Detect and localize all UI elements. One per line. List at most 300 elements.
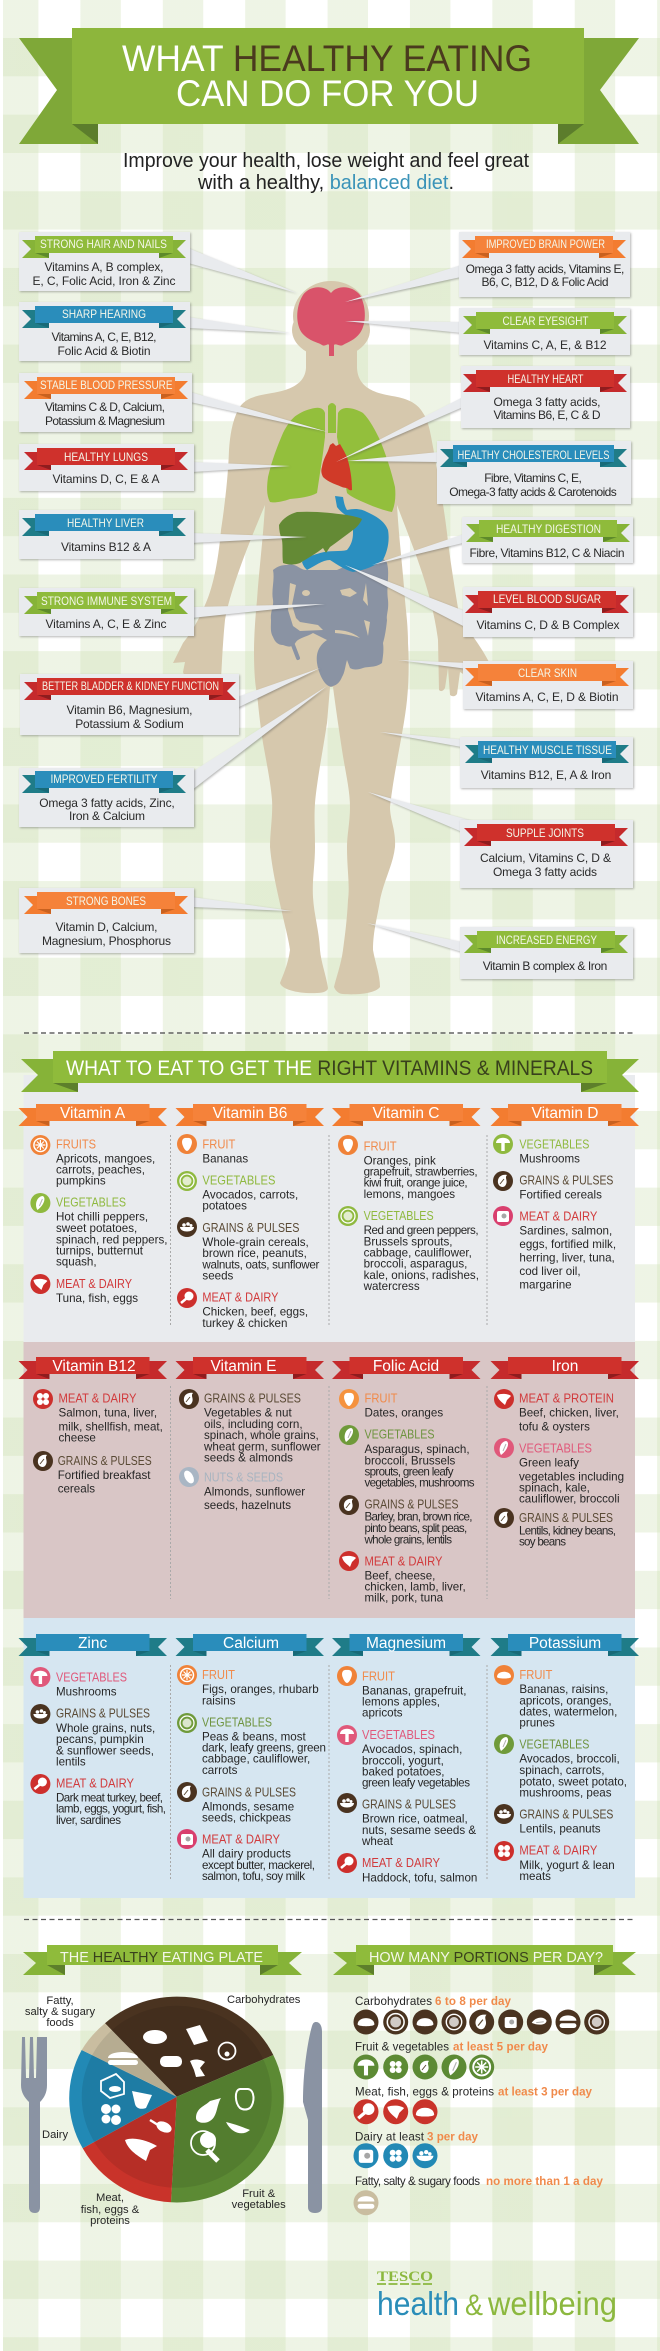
icon: vegetables (494, 1438, 514, 1458)
callout: healthy lungs (19, 444, 290, 491)
column: Zinc: lamb, eggs, yogurt, fish, (56, 1803, 166, 1816)
column: Vitamin E: oils, including corn, (204, 1418, 303, 1431)
column: Vitamin D: Vitamin D (532, 1105, 598, 1122)
column: Zinc: VEGETABLES (56, 1670, 127, 1684)
column: Vitamin E: Almonds, sunflower (204, 1486, 305, 1499)
column: Calcium: Calcium (223, 1635, 279, 1652)
column: Vitamin A: pumpkins (56, 1175, 106, 1188)
card (460, 820, 633, 888)
column: Potassium: Lentils, peanuts (519, 1823, 601, 1836)
callout: increased energy: Vitamin B complex & Iron (483, 959, 607, 973)
ribbon heading (22, 236, 186, 258)
callout: improved fertility: Omega 3 fatty acids, Zinc, (39, 796, 175, 810)
column: Potassium: MEAT & DAIRY (519, 1844, 598, 1858)
column: Vitamin A: squash, (56, 1256, 97, 1269)
callout: increased energy (367, 923, 633, 979)
icon: meat (337, 1853, 357, 1873)
card (463, 661, 633, 709)
card (19, 510, 194, 559)
callout: improved fertility: IMPROVED FERTILITY (50, 772, 158, 786)
column: Folic Acid: whole grains, lentils (364, 1533, 452, 1546)
column: Vitamin B6: turkey & chicken (202, 1317, 287, 1330)
column: Potassium: VEGETABLES (519, 1737, 589, 1751)
plate pie chart: proteins (90, 2215, 130, 2227)
icon: vegetables (494, 1734, 514, 1754)
body silhouette (173, 281, 489, 994)
column: Vitamin B12: milk, shellfish, meat, (58, 1420, 163, 1433)
column: Magnesium: Magnesium (366, 1635, 446, 1652)
column: Vitamin A: VEGETABLES (56, 1196, 126, 1210)
icons row (354, 2054, 494, 2080)
callout: clear eyesight: Vitamins C, A, E, & B12 (484, 338, 607, 352)
pointer to shin (192, 897, 292, 911)
column: Magnesium: FRUIT (362, 1669, 395, 1683)
logo: Tesco health and wellbeing: wellbeing (487, 2285, 617, 2322)
card (463, 587, 633, 637)
icon: grains (339, 1495, 359, 1515)
column: Vitamin B12: Vitamin B12 (52, 1358, 136, 1375)
column: Calcium: MEAT & DAIRY (202, 1832, 281, 1846)
column: Vitamin B6: walnuts, oats, sunflower (201, 1258, 320, 1271)
column: Folic Acid: milk, pork, tuna (364, 1592, 444, 1605)
ribbon heading (464, 824, 628, 846)
card (19, 444, 194, 491)
icon: fruit (338, 1135, 358, 1155)
column: Vitamin B6 (176, 1104, 324, 1330)
column: Vitamin E: NUTS & SEEDS (204, 1471, 283, 1485)
intro text: with a healthy, balanced diet. (197, 172, 454, 194)
logo: Tesco health and wellbeing: & (465, 2289, 483, 2322)
card (19, 302, 190, 361)
column: Magnesium: Brown rice, oatmeal, (362, 1813, 468, 1826)
column: Zinc: Zinc (78, 1635, 107, 1652)
icon: fruit (177, 1134, 197, 1154)
heart (321, 443, 352, 490)
column: Zinc: Dark meat turkey, beef, (56, 1792, 163, 1805)
callout: supple joints (368, 792, 633, 888)
callout: healthy heart: HEALTHY HEART (508, 372, 584, 386)
icon: grains (177, 1782, 197, 1802)
plate pie chart (25, 1994, 301, 2227)
icon: meat (30, 1274, 50, 1294)
plate label: fatty: Fatty, (46, 1995, 74, 2007)
column: Potassium: spinach, carrots, (519, 1764, 604, 1777)
ribbon heading (465, 664, 629, 686)
callout: stable blood pressure: STABLE BLOOD PRESSURE (40, 378, 173, 392)
icons row (354, 2010, 609, 2034)
column: Folic Acid: GRAINS & PULSES (364, 1498, 458, 1512)
column: Calcium: VEGETABLES (202, 1715, 272, 1729)
callout: healthy lungs: Vitamins D, C, E & A (52, 472, 160, 486)
column: Iron: GRAINS & PULSES (519, 1511, 613, 1525)
ribbon heading (24, 592, 188, 614)
callout: level blood sugar: Vitamins C, D & B Complex (476, 618, 620, 632)
card (437, 441, 631, 504)
ribbon heading (24, 892, 188, 914)
column: Potassium: dates, watermelon, (519, 1705, 617, 1718)
column: Vitamin A: Apricots, mangoes, (56, 1152, 155, 1165)
pointer to gut (372, 533, 467, 565)
column: Vitamin A: FRUITS (56, 1137, 96, 1151)
plate pie chart: vegetables (232, 2199, 286, 2211)
panel: orange vitamins (24, 1075, 635, 1342)
column: Calcium: All dairy products (202, 1848, 291, 1861)
callout: clear skin: CLEAR SKIN (518, 666, 577, 680)
callout: level blood sugar: LEVEL BLOOD SUGAR (493, 592, 601, 606)
callout: healthy muscle tissue: HEALTHY MUSCLE TISSUE (483, 743, 612, 757)
callout: improved brain power: B6, C, B12, D & Folic Acid (482, 275, 608, 289)
column: Magnesium: Avocados, spinach, (362, 1743, 462, 1756)
column: Magnesium: nuts, sesame seeds & (362, 1824, 476, 1837)
pointer to ear (188, 317, 290, 333)
icon: grains (494, 1804, 514, 1824)
icon: vegetables (177, 1713, 197, 1733)
column: Vitamin D: cod liver oil, (519, 1265, 581, 1278)
icon: meat (177, 1288, 197, 1308)
icon: grains (494, 1508, 514, 1528)
card (460, 927, 633, 979)
column: Calcium: carrots (202, 1764, 238, 1777)
intestine gaps (288, 583, 370, 638)
column: Potassium (490, 1634, 639, 1883)
ribbon heading (24, 678, 236, 700)
icon: vegetables (338, 1206, 358, 1226)
intestines (271, 558, 388, 687)
card (19, 588, 194, 636)
column: Vitamin B6: Whole-grain cereals, (202, 1236, 309, 1249)
column: Folic Acid: Beef, cheese, (364, 1569, 435, 1582)
column: Calcium: Peas & beans, most (202, 1730, 307, 1743)
callout: healthy digestion (372, 517, 633, 565)
callout: supple joints: Calcium, Vitamins C, D & (480, 851, 611, 865)
column: Vitamin A: Tuna, fish, eggs (56, 1292, 138, 1305)
column: Vitamin B12: cheese (58, 1431, 96, 1444)
column: Zinc: liver, sardines (56, 1814, 121, 1827)
ribbon heading (24, 448, 188, 470)
banner: how many portions per day (333, 1945, 636, 1975)
column: Vitamin A: sweet potatoes, (56, 1222, 137, 1235)
column: Calcium: raisins (202, 1694, 236, 1707)
column: Vitamin B6: Vitamin B6 (213, 1105, 287, 1122)
column: Iron: spinach, kale, (519, 1481, 590, 1494)
column: Calcium (176, 1634, 326, 1883)
icons row (354, 2143, 438, 2168)
card (19, 232, 190, 291)
icon: meat (33, 1389, 53, 1409)
column: Vitamin C: kale, onions, radishes, (364, 1269, 479, 1282)
pointer to eye (345, 321, 462, 333)
column: Calcium: Almonds, sesame (202, 1800, 294, 1813)
column: Calcium: cabbage, cauliflower, (202, 1753, 310, 1766)
logo: Tesco health and wellbeing: TESCO (377, 2269, 433, 2285)
column: Vitamin B6: brown rice, peanuts, (202, 1247, 307, 1260)
column: Vitamin B6: Chicken, beef, eggs, (202, 1306, 308, 1319)
column: Iron: soy beans (519, 1535, 566, 1548)
column: Folic Acid: VEGETABLES (364, 1428, 434, 1442)
callout: strong bones (19, 888, 292, 953)
callout: healthy lungs: HEALTHY LUNGS (64, 450, 148, 464)
icon: fork (21, 2037, 47, 2213)
column: Zinc: MEAT & DAIRY (56, 1777, 135, 1791)
icons row (354, 2099, 438, 2124)
column: Folic Acid: pinto beans, split peas, (364, 1522, 467, 1535)
callout: strong hair and nails: Vitamins A, B complex, (44, 260, 164, 274)
column: Vitamin B12 (18, 1357, 167, 1496)
callout: strong hair and nails: STRONG HAIR AND NAILS (40, 237, 167, 251)
callout: strong bones: Magnesium, Phosphorus (42, 934, 171, 948)
column: Vitamin E: Vitamin E (210, 1358, 277, 1375)
card (461, 366, 630, 428)
portions: carbohydrates: Carbohydrates (355, 1995, 432, 2008)
plate label: meat: Meat, (96, 2192, 124, 2204)
icon: meat (494, 1389, 514, 1409)
column: Vitamin C: lemons, mangoes (364, 1188, 455, 1201)
icon: grains (30, 1704, 50, 1724)
segment: carbohydrates (105, 1997, 273, 2097)
icon: vegetables (177, 1171, 197, 1191)
column: Vitamin A: turnips, butternut (56, 1244, 144, 1257)
icon: grains (337, 1793, 357, 1813)
column: Magnesium: broccoli, yogurt, (362, 1754, 444, 1767)
callout: healthy cholesterol levels: Omega-3 fatty acids & Carotenoids (449, 485, 617, 499)
column: Vitamin C (332, 1104, 480, 1293)
callout: strong immune system (19, 588, 325, 636)
logo: Tesco health and wellbeing: health (377, 2285, 459, 2322)
callout: supple joints: Omega 3 fatty acids (493, 865, 597, 879)
icon: vegetables (30, 1193, 50, 1213)
callout: improved brain power: Omega 3 fatty acids, Vitamins E, (466, 262, 624, 276)
pointer to pelvis (192, 686, 327, 790)
column: Zinc: Whole grains, nuts, (56, 1722, 155, 1735)
column: Potassium: Potassium (529, 1635, 601, 1652)
column: Iron: vegetables including (519, 1470, 624, 1483)
icon: meat (494, 1841, 514, 1861)
portions: dairy (354, 2131, 479, 2168)
column: Magnesium: apricots (362, 1707, 403, 1720)
callout: healthy liver (19, 510, 307, 559)
title text: WHAT HEALTHY EATING (122, 38, 532, 79)
icon: fruit (494, 1665, 514, 1685)
callout: healthy liver: HEALTHY LIVER (67, 516, 144, 530)
callout: clear skin: Vitamins A, C, E, D & Biotin (476, 690, 618, 704)
column: Vitamin B12: Salmon, tuna, liver, (58, 1407, 157, 1420)
column: Folic Acid: Dates, oranges (364, 1407, 443, 1420)
callout: healthy digestion: HEALTHY DIGESTION (496, 522, 601, 536)
callout: improved brain power (345, 232, 630, 302)
column: Zinc: Mushrooms (56, 1685, 117, 1698)
panel: blue vitamins (24, 1618, 635, 1898)
column: Potassium: meats (519, 1870, 551, 1883)
callout: healthy heart: Omega 3 fatty acids, (494, 395, 600, 409)
column: Folic Acid (332, 1357, 480, 1605)
pointer to lung (192, 462, 290, 472)
liver (279, 512, 362, 564)
column: Magnesium (332, 1634, 480, 1884)
column: Vitamin B12: cereals (58, 1483, 95, 1496)
column: Vitamin B6: Bananas (202, 1152, 248, 1165)
callout: healthy liver: Vitamins B12 & A (61, 540, 151, 554)
segment: meat (83, 2097, 177, 2202)
icon: vegetables (339, 1425, 359, 1445)
icon: grains (179, 1389, 199, 1409)
callout: strong immune system: Vitamins A, C, E & Zinc (46, 617, 166, 631)
portions: carbohydrates: 6 to 8 per day (435, 1995, 512, 2008)
column: Vitamin C: kiwi fruit, orange juice, (364, 1177, 468, 1190)
callout: supple joints: SUPPLE JOINTS (506, 826, 584, 840)
callout: improved fertility: Iron & Calcium (69, 809, 145, 823)
human body figure (173, 281, 489, 994)
column: Folic Acid: broccoli, Brussels (364, 1454, 456, 1467)
column: Vitamin E: spinach, whole grains, (204, 1429, 319, 1442)
portions: fatty salty and sugary foods (354, 2175, 604, 2215)
column: Magnesium: baked potatoes, (362, 1765, 445, 1778)
logo: Tesco health and wellbeing (377, 2269, 617, 2322)
callout: healthy digestion: Fibre, Vitamins B12, C & Niacin (470, 546, 624, 560)
column: Vitamin D: Mushrooms (519, 1152, 580, 1165)
icon: fruit (337, 1666, 357, 1686)
intro text (123, 150, 529, 194)
column: Vitamin D (490, 1104, 639, 1292)
callout: better bladder and kidney function: BETTER BLADDER & KIDNEY FUNCTION (42, 679, 219, 693)
column: Calcium: dark, leafy greens, green (202, 1742, 326, 1755)
portions: fatty salty and sugary foods: no more than 1 a day (486, 2175, 604, 2188)
column: Magnesium: MEAT & DAIRY (362, 1856, 441, 1870)
callout: healthy heart: Vitamins B6, E, C & D (494, 408, 601, 422)
column: Vitamin D: Fortified cereals (519, 1188, 602, 1201)
ribbon heading (463, 370, 627, 392)
column: Vitamin B6: GRAINS & PULSES (202, 1221, 299, 1235)
column: Zinc: & sunflower seeds, (56, 1744, 154, 1757)
callout: stable blood pressure: Potassium & Magnesium (45, 414, 165, 428)
callout: increased energy: INCREASED ENERGY (496, 933, 597, 947)
ribbon heading (24, 377, 188, 399)
pointer to stomach (345, 565, 467, 628)
icon: meat (493, 1206, 513, 1226)
column: Vitamin C: Vitamin C (373, 1105, 439, 1122)
callout: healthy cholesterol levels: Fibre, Vitamins C, E, (484, 471, 582, 485)
column: Vitamin C: broccoli, asparagus, (364, 1258, 467, 1271)
column: Magnesium: green leafy vegetables (362, 1777, 470, 1790)
column: Folic Acid: Folic Acid (373, 1358, 439, 1375)
banner: the healthy eating plate: THE HEALTHY EATING PLATE (60, 1949, 263, 1966)
ribbon heading (462, 236, 626, 258)
plate label: fruit and vegetables: Fruit & (242, 2188, 276, 2200)
portions: carbohydrates (354, 1995, 609, 2034)
callout: strong bones: STRONG BONES (66, 894, 146, 908)
column: Vitamin A: Hot chilli peppers, (56, 1211, 148, 1224)
column: Magnesium: GRAINS & PULSES (362, 1797, 456, 1811)
column: Iron: Lentils, kidney beans, (519, 1524, 616, 1537)
title banner (19, 28, 639, 144)
column: Vitamin E: seeds & almonds (204, 1452, 293, 1465)
column: Vitamin C: Oranges, pink (364, 1154, 436, 1167)
ribbon heading (22, 771, 186, 793)
callout: sharp hearing: Vitamins A, C, E, B12, (52, 330, 156, 344)
callout: clear eyesight (345, 308, 630, 355)
icon: nuts (179, 1467, 199, 1487)
column: Iron: Beef, chicken, liver, (519, 1407, 619, 1420)
column: Magnesium: lemons apples, (362, 1695, 440, 1708)
column: Vitamin D: margarine (519, 1279, 572, 1292)
column: Potassium: Bananas, raisins, (519, 1683, 608, 1696)
column: Vitamin A: spinach, red peppers, (56, 1233, 168, 1246)
lungs (267, 403, 395, 512)
pointer to head (188, 248, 297, 293)
column: Vitamin B12: Fortified breakfast (58, 1469, 151, 1482)
intro text: Improve your health, lose weight and feel great (123, 150, 529, 172)
callout: sharp hearing (19, 302, 290, 361)
icon: meat (30, 1774, 50, 1794)
column: Vitamin B6: Avocados, carrots, (202, 1188, 298, 1201)
left white edge strip (0, 0, 3, 2351)
stomach (302, 496, 389, 572)
column: Vitamin A (18, 1104, 168, 1305)
column: Vitamin C: Brussels sprouts, (364, 1235, 453, 1248)
icon: knife (303, 2022, 322, 2213)
column: Vitamin C: cabbage, cauliflower, (364, 1246, 472, 1259)
column: Vitamin D: VEGETABLES (519, 1137, 589, 1151)
callout: clear eyesight: CLEAR EYESIGHT (502, 314, 588, 328)
icon: vegetables (337, 1725, 357, 1745)
pointer to knee (368, 792, 472, 834)
column: Vitamin C: VEGETABLES (364, 1209, 434, 1223)
callout: clear skin (398, 660, 633, 709)
column: Vitamin B12: MEAT & DAIRY (58, 1392, 137, 1406)
portions: fruit and vegetables (354, 2041, 549, 2080)
column: Potassium: apricots, oranges, (519, 1694, 612, 1707)
pointer to chest (190, 392, 328, 432)
column: Potassium: Milk, yogurt & lean (519, 1859, 615, 1872)
pointer to liver (191, 533, 307, 543)
column: Iron: tofu & oysters (519, 1420, 590, 1433)
portions: dairy: Dairy at least (355, 2131, 425, 2144)
plate pie chart: salty & sugary (25, 2006, 96, 2018)
column: Potassium: mushrooms, peas (519, 1787, 612, 1800)
segment: fatty foods (82, 2023, 177, 2097)
icon: meat (177, 1829, 197, 1849)
plate label: dairy: Dairy (42, 2129, 69, 2141)
pointer to hip (398, 660, 468, 669)
column: Vitamin B6: seeds (202, 1270, 234, 1283)
column: Folic Acid: sprouts, green leafy (364, 1466, 454, 1479)
column: Folic Acid: vegetables, mushrooms (364, 1477, 475, 1490)
column: Folic Acid: FRUIT (364, 1392, 398, 1406)
portions: fruit and vegetables: Fruit & vegetables (355, 2041, 449, 2054)
column: Zinc: lentils (56, 1755, 86, 1768)
callout: healthy muscle tissue: Vitamins B12, E, A & Iron (481, 768, 611, 782)
column: Vitamin D: eggs, fortified milk, (519, 1238, 616, 1251)
column: Vitamin B6: VEGETABLES (202, 1174, 275, 1188)
callout: better bladder and kidney function (20, 668, 320, 735)
food icons (101, 2025, 254, 2161)
plate pie chart: foods (46, 2017, 74, 2029)
icon: grains (177, 1217, 197, 1237)
column: Iron: MEAT & PROTEIN (519, 1392, 614, 1406)
portions: meat fish eggs and proteins: Meat, fish, eggs & proteins (355, 2086, 494, 2099)
callout: strong bones: Vitamin D, Calcium, (56, 920, 158, 934)
plate label: carbohydrates: Carbohydrates (227, 1994, 301, 2006)
icons row (354, 2190, 378, 2215)
column: Vitamin D: MEAT & DAIRY (519, 1210, 598, 1224)
column: Calcium: seeds, chickpeas (202, 1811, 291, 1824)
column: Folic Acid: chicken, lamb, liver, (364, 1580, 466, 1593)
callout: healthy cholesterol levels (347, 441, 631, 504)
callout: strong hair and nails (19, 232, 297, 293)
column: Folic Acid: Barley, bran, brown rice, (364, 1511, 472, 1524)
column: Vitamin B6: potatoes (202, 1200, 247, 1213)
callout: better bladder and kidney function: Potassium & Sodium (75, 717, 184, 731)
ribbon heading (465, 741, 629, 763)
